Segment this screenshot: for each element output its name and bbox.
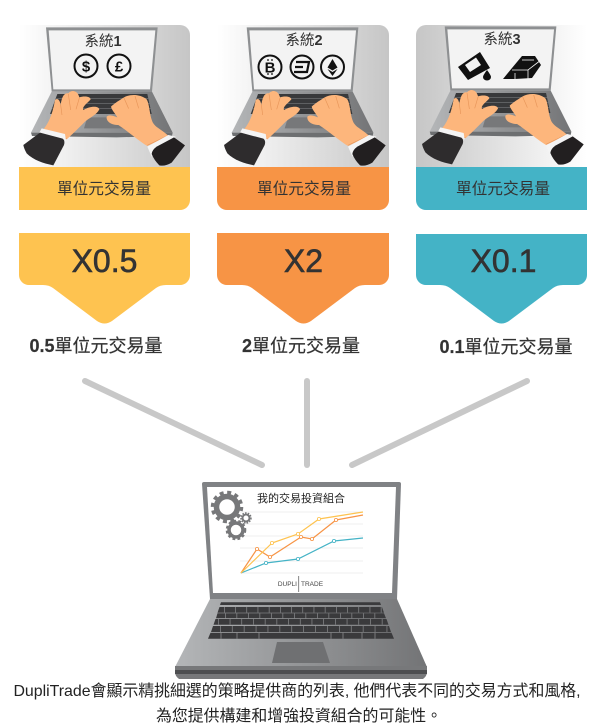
label: system 2: 系統2 [285, 32, 323, 49]
icon: pound [108, 54, 130, 78]
connector: left [85, 381, 262, 465]
multiplier tag: x2 [217, 233, 389, 324]
band: unit volume 3 [416, 167, 587, 210]
result label: 2: 2單位元交易量 [242, 336, 360, 356]
result label: 0.1: 0.1單位元交易量 [439, 337, 573, 357]
portfolio laptop [175, 482, 427, 679]
illustration: typing on laptop 1 [23, 27, 185, 166]
panel: system 3 [416, 25, 587, 210]
icon: dash [290, 56, 314, 78]
illustration: typing on laptop 3 [422, 26, 584, 165]
trackpad [272, 642, 330, 663]
icon: ethereum [321, 56, 344, 78]
illustration: typing on laptop 2 [224, 27, 386, 166]
icon: pound: £ [115, 58, 124, 76]
band: unit volume 2: 單位元交易量 [257, 180, 351, 198]
caption: 為您提供構建和增強投資組合的可能性。 [156, 707, 442, 725]
logo: DupliTrade: TRADE [301, 581, 324, 588]
panel: system 1 [19, 25, 190, 210]
caption [13, 681, 581, 725]
chart [240, 512, 363, 573]
panel: system 2 [217, 25, 389, 210]
caption: DupliTrade會顯示精挑細選的策略提供商的列表, 他們代表不同的交易方式和風格, [13, 681, 581, 700]
icon: gold bars [503, 56, 541, 79]
band: unit volume 3: 單位元交易量 [456, 180, 550, 198]
icon: dollar: $ [82, 58, 91, 76]
result label: 0.5: 0.5單位元交易量 [29, 336, 163, 356]
screen title: 我的交易投資組合 [257, 491, 345, 505]
multiplier tag: x0.5: X0.5 [72, 243, 137, 279]
icon: gears [212, 492, 251, 539]
connector: right [352, 381, 527, 465]
label: system 3: 系統3 [483, 31, 521, 48]
logo: DupliTrade: DUPLI [278, 581, 297, 588]
keyboard [208, 602, 394, 639]
band: unit volume 1: 單位元交易量 [57, 180, 151, 198]
band: unit volume 2 [217, 167, 389, 210]
multiplier tag: x0.1: X0.1 [471, 243, 536, 279]
icon: bitcoin: B [265, 60, 276, 76]
label: system 1: 系統1 [84, 33, 122, 50]
multiplier tag: x0.5 [19, 233, 190, 324]
icon: bitcoin [258, 56, 282, 78]
band: unit volume 1 [19, 167, 190, 210]
multiplier tag: x2: X2 [284, 243, 323, 279]
connector: centre [304, 381, 310, 465]
logo: DupliTrade [278, 576, 324, 592]
icon: oil barrel [458, 52, 491, 81]
multiplier tag: x0.1 [416, 234, 587, 324]
icon: dollar [74, 54, 98, 78]
